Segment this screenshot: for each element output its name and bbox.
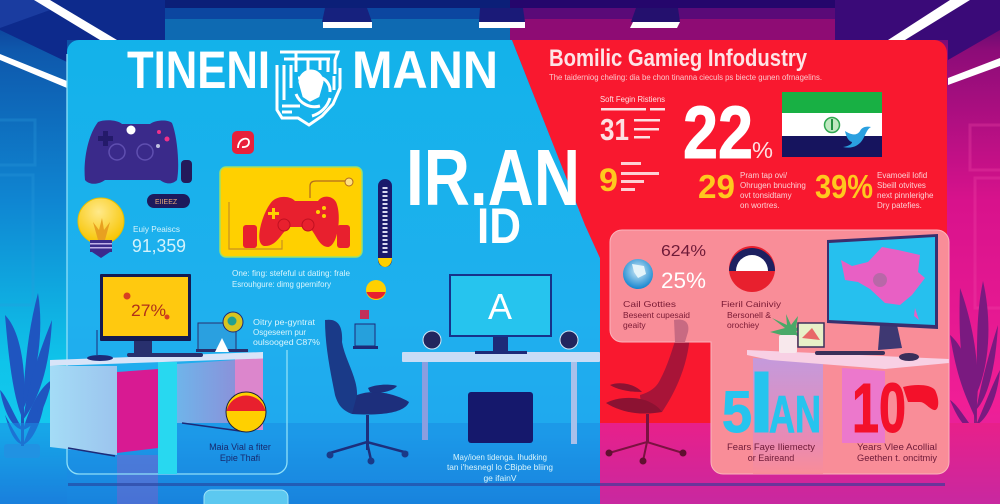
speakers — [423, 331, 578, 349]
stat: 39%: Dry patefies. — [877, 201, 922, 210]
chair: right red — [606, 335, 690, 464]
stat: 22%: 22 — [683, 91, 753, 174]
text: desk caption: Maia Vial a fiter — [209, 442, 271, 452]
stat: 29: ovt tonsidtamy — [740, 191, 792, 200]
stat: 9 with lines — [599, 162, 659, 198]
text: 10 caption: Years Vlee Acollial — [857, 442, 937, 452]
door frame on right wall — [970, 125, 1000, 308]
background: magenta room wall — [515, 0, 1000, 504]
stat: 39%: 39% — [815, 168, 873, 205]
text: red panel subtitle: The taiderniog cheling: dia be chon tinanna cieculs ps biecte gunen ofrnagelins. — [549, 72, 822, 82]
text: 5IAN caption — [727, 442, 816, 463]
stat: 29: on wortres. — [740, 201, 780, 210]
text: desk caption — [209, 442, 271, 463]
text: center panel caption — [721, 299, 782, 330]
stat: daily players: 91,359 — [132, 236, 186, 256]
floor: red side — [600, 423, 1000, 504]
outline: blue lower panel — [67, 54, 287, 474]
text: 10 caption: Geethen t. oncitmiy — [857, 453, 938, 463]
text: center panel caption: orochiey — [727, 320, 760, 330]
ceiling: dark top band — [0, 0, 1000, 62]
icon: small laptop — [353, 310, 378, 349]
stat: 29 — [698, 168, 806, 210]
stat: 10 with controller: 10 — [852, 369, 906, 447]
stat: 29: Ohrugen bnuching — [740, 181, 806, 190]
heading: red panel: Bomilic Gamieg Infodustry — [549, 45, 808, 72]
stat: 25%: 25% — [661, 268, 706, 293]
laptop and badge on desk — [196, 312, 248, 352]
monitor: left yellow — [87, 274, 203, 361]
icon: game controller navy — [85, 120, 178, 184]
laptop: right small — [798, 323, 824, 347]
stat: 624%: 624% — [661, 243, 706, 260]
chair back over panel — [674, 320, 688, 342]
icon: navy pill with label: EIIEEZ — [155, 199, 178, 206]
icon: maze emblem — [277, 52, 340, 125]
panel: red main — [512, 40, 947, 425]
icon: red-yellow flag circle — [226, 392, 266, 432]
text: side stat: oulsooged C87% — [253, 337, 320, 347]
text: left panel caption: Cail Gotties — [623, 299, 676, 309]
big heading: IRAN: ID — [477, 198, 521, 254]
flag with bird — [782, 92, 882, 157]
text: side stat: Oitry pe-gyntrat — [253, 317, 316, 327]
chair: center blue — [325, 320, 409, 464]
ceiling light strips — [0, 0, 1000, 88]
plant: right — [950, 281, 1000, 448]
stat: 39%: Evamoeil Iofid — [877, 171, 927, 180]
stat: 29: Pram tap ovi/ — [740, 171, 788, 180]
stat: 9 with lines: 9 — [599, 162, 618, 198]
text: side stat — [253, 317, 320, 347]
ceiling lamps — [322, 8, 680, 28]
lower floor stripe — [68, 483, 945, 486]
stat: 39%: next pinnlerighe — [877, 191, 934, 200]
icon: yellow-red badge — [366, 280, 386, 300]
title: TINENI — [127, 41, 270, 100]
text: 5IAN caption: or Eaireand — [748, 453, 794, 463]
small glass panel at bottom — [204, 490, 288, 504]
panel: blue main — [67, 40, 600, 504]
monitor: center: A — [488, 286, 512, 327]
box: dark console — [468, 392, 533, 443]
stat: 39% — [815, 168, 934, 210]
panel: pink lower right — [610, 230, 949, 474]
plant and pot — [770, 314, 806, 353]
icon: small device — [181, 160, 192, 183]
text: center panel caption: Fieril Cainiviy — [721, 299, 782, 309]
title: MANN — [352, 41, 498, 100]
text: yellow card caption: Esrouhgure: dimg gpernifory — [232, 279, 332, 289]
stat: 5IAN: 5 — [722, 380, 752, 445]
text: left panel caption: Beseent cupesaid — [623, 310, 690, 320]
big heading: IRAN: IR.AN — [406, 133, 580, 222]
icon: navy white red circle — [729, 246, 775, 292]
text: center caption: ge ifainV — [483, 473, 517, 483]
stat: 31 with lines: 31 — [600, 112, 629, 147]
stat: daily players: Euiy Peaiscs — [133, 224, 180, 234]
text: 10 caption — [857, 442, 938, 463]
stat: 5IAN: AN — [769, 386, 821, 444]
monitor: center — [449, 274, 552, 354]
stat: 31 with lines — [600, 95, 665, 147]
floor: blue side — [0, 423, 600, 504]
text: desk caption: Epie Thafi — [220, 453, 260, 463]
text: center panel caption: Bersonell & — [727, 310, 771, 320]
stat: 39%: Sbeill otvitves — [877, 181, 926, 190]
desk reflection on blue floor — [117, 455, 158, 504]
text: yellow card caption — [232, 268, 350, 289]
desk: left — [50, 352, 263, 474]
icon: globe — [623, 259, 653, 289]
title — [127, 41, 498, 100]
icon: navy pill with label — [147, 194, 190, 208]
desk: center — [402, 352, 600, 444]
icon: light bulb — [78, 198, 124, 258]
stat: daily players — [132, 224, 186, 256]
card: yellow gamepad — [220, 167, 362, 257]
text: 5IAN caption: Fears Faye Iliemecty — [727, 442, 816, 452]
stat: 5IAN — [722, 372, 821, 445]
big heading: IRAN — [406, 133, 580, 254]
text: left panel caption: geaity — [623, 320, 646, 330]
text: yellow card caption: One: fing: stefeful ut dating: frale — [232, 268, 350, 278]
monitor: left yellow: 27% — [131, 301, 166, 320]
text: side stat: Osgeseern pur — [253, 327, 306, 337]
text: center caption: tan i'hesnegl lo CBipbe bliing — [447, 462, 553, 472]
text: center caption — [447, 452, 553, 483]
stat: 31 with lines: Soft Fegin Ristiens — [600, 95, 665, 104]
stat: 29: 29 — [698, 168, 735, 205]
stat: 22%: % — [752, 137, 773, 163]
icon: red app tile — [232, 131, 254, 154]
text: left panel caption — [623, 299, 690, 330]
monitor: right with map — [827, 234, 938, 350]
plant: left — [0, 293, 52, 458]
background: blue room wall — [0, 0, 600, 504]
text: center caption: May/ioen tidenga. Ihudking — [453, 452, 547, 462]
desk: right — [747, 350, 949, 474]
icon: navy vertical strip — [378, 179, 392, 267]
window frame on left wall — [0, 120, 35, 305]
keyboard and mouse — [815, 351, 919, 361]
